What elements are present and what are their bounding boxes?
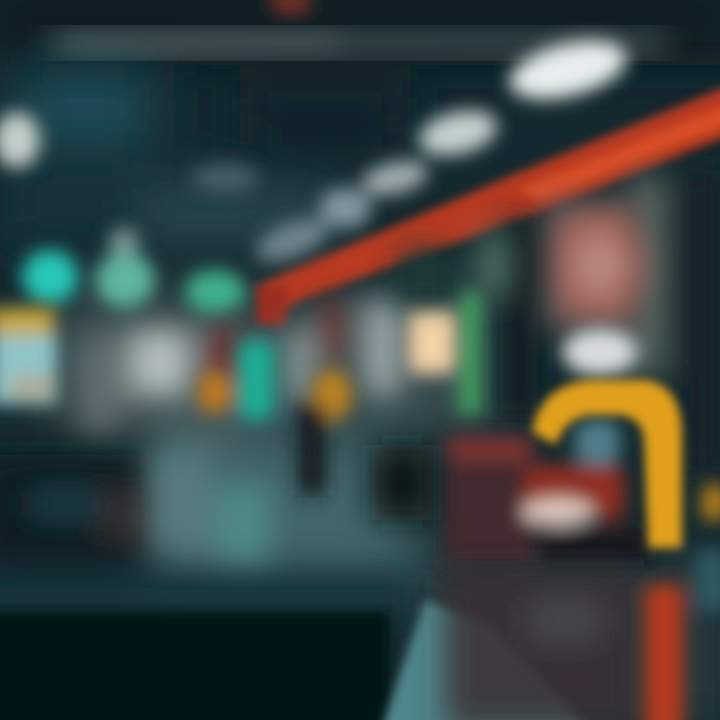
yellow arch machine — [532, 380, 682, 548]
machine body in red and white — [445, 420, 720, 565]
top red mark — [272, 0, 310, 14]
left bright screen — [0, 308, 58, 405]
teal floor lower centre — [150, 450, 270, 560]
peach glowing panel — [408, 308, 456, 374]
red floor stripe — [645, 550, 720, 720]
centre bright shapes — [80, 300, 400, 430]
black floor corner — [0, 612, 390, 720]
dark central block — [372, 170, 720, 520]
orange, green and teal figures — [198, 290, 484, 495]
red round sign — [545, 200, 646, 330]
teal and green lamps — [22, 228, 245, 314]
dark lower-left floor — [0, 455, 410, 614]
top banner strip — [48, 34, 668, 52]
teal floor wedge — [378, 600, 600, 720]
red floor reflection — [445, 570, 635, 720]
red diagonal beam — [255, 85, 720, 325]
ceiling lights — [0, 30, 633, 270]
white dome — [562, 328, 638, 376]
